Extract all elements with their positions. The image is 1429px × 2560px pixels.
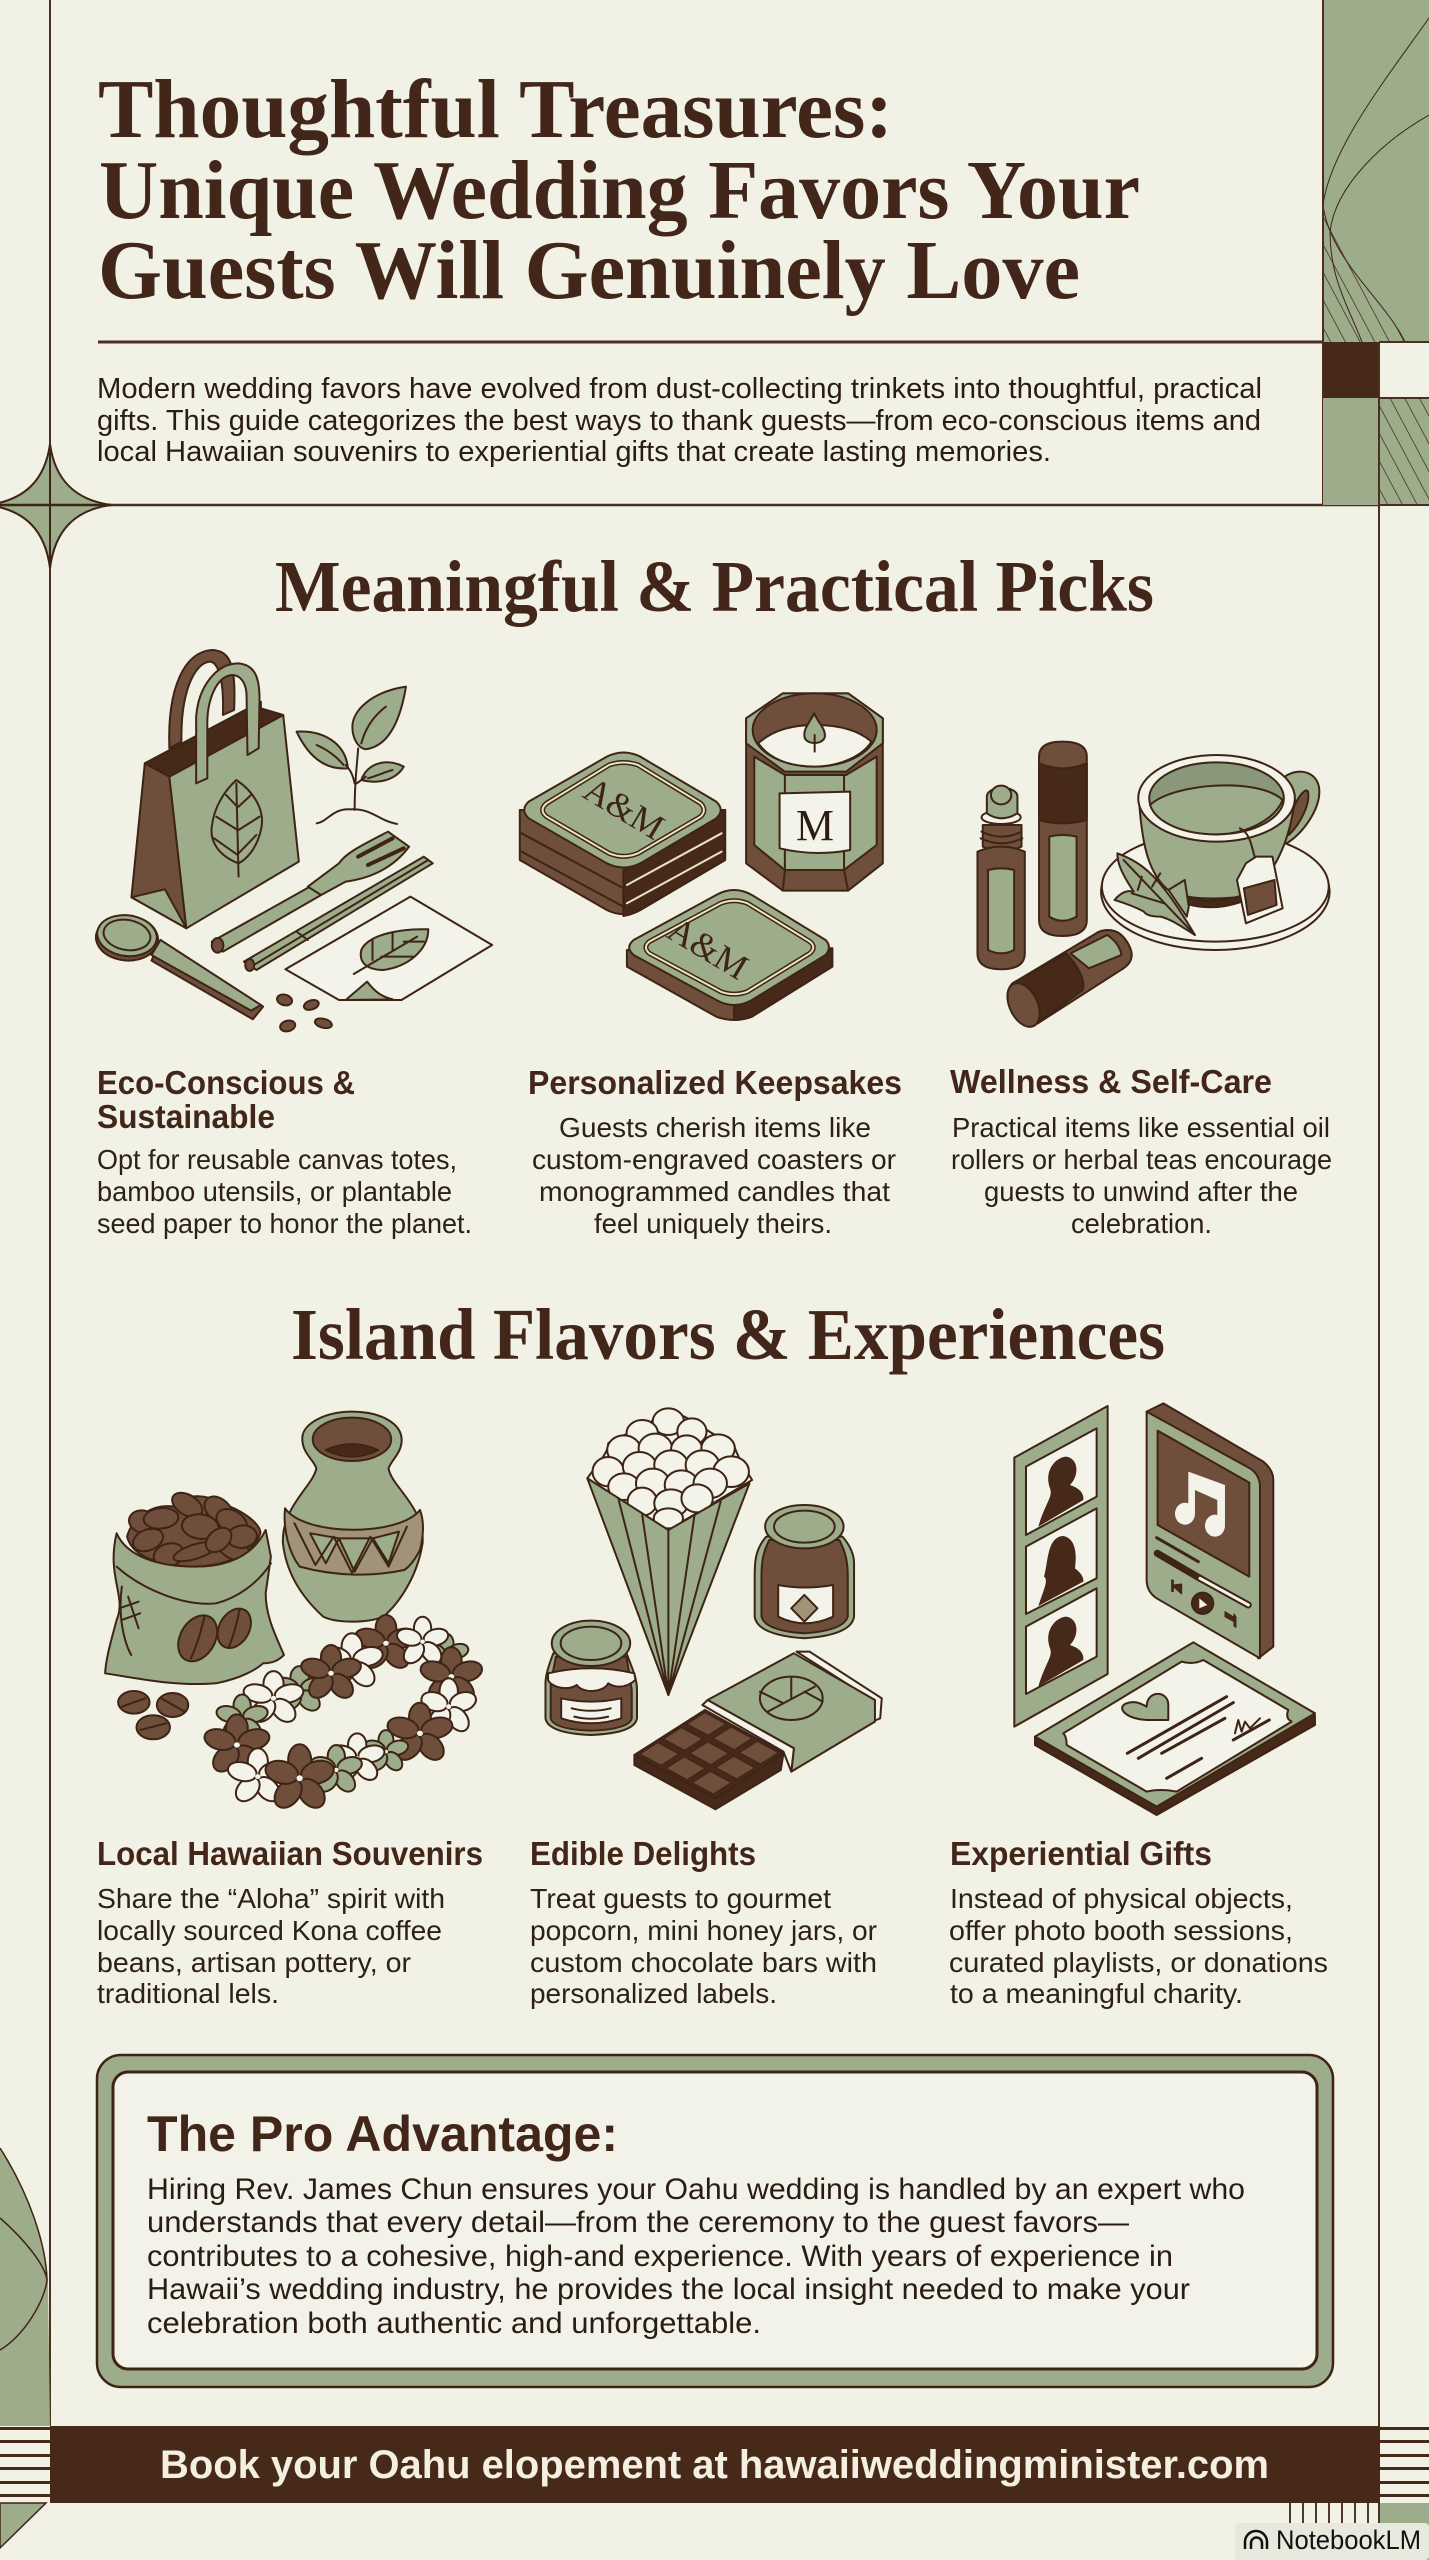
description: popcorn, mini honey jars, or: [530, 1915, 877, 1946]
description: Guests cherish items like: [559, 1112, 871, 1143]
description: [951, 1112, 1332, 1239]
top right geometric panel: [1323, 0, 1429, 505]
card: local hawaiian souvenirs: [97, 1412, 485, 2009]
icon: coasters and candle: M: [796, 801, 834, 850]
heading: Experiential Gifts: [950, 1835, 1212, 1872]
description: bamboo utensils, or plantable: [97, 1176, 452, 1207]
description: celebration.: [1071, 1208, 1212, 1239]
intro paragraph: [97, 373, 1262, 468]
description: traditional lels.: [97, 1978, 279, 2009]
section heading: island flavors and experiences: Island Flavors & Experiences: [291, 1294, 1165, 1375]
title: Thoughtful Treasures:: [98, 63, 893, 156]
intro paragraph: Modern wedding favors have evolved from dust-collecting trinkets into thoughtful, practical: [97, 373, 1262, 405]
title: [98, 63, 1140, 317]
icon: coffee sack, vase, lei: [105, 1412, 485, 1813]
card: edible delights: [530, 1408, 882, 2009]
description: curated playlists, or donations: [949, 1947, 1328, 1978]
panel body text: Hiring Rev. James Chun ensures your Oahu wedding is handled by an expert who: [147, 2173, 1245, 2206]
description: rollers or herbal teas encourage: [951, 1144, 1332, 1175]
panel body text: [147, 2173, 1245, 2340]
heading: Wellness & Self-Care: [950, 1063, 1272, 1100]
title: Unique Wedding Favors Your: [99, 144, 1140, 237]
heading: Local Hawaiian Souvenirs: [97, 1835, 483, 1872]
heading: Personalized Keepsakes: [528, 1064, 902, 1101]
icon: photo strip, music player, donation card: [1014, 1403, 1315, 1815]
panel body text: understands that every detail—from the ceremony to the guest favors—: [147, 2206, 1129, 2239]
icon: coasters and candle: [520, 693, 883, 1020]
description: monogrammed candles that: [539, 1176, 890, 1207]
card: eco-conscious and sustainable: [86, 650, 492, 1239]
description: Treat guests to gourmet: [530, 1883, 831, 1914]
card: personalized keepsakes: [520, 693, 902, 1239]
description: personalized labels.: [530, 1978, 777, 2009]
bottom corner ornaments: [0, 2503, 1429, 2560]
title: Guests Will Genuinely Love: [98, 224, 1080, 317]
description: guests to unwind after the: [984, 1176, 1298, 1207]
description: beans, artisan pottery, or: [97, 1947, 411, 1978]
footer side stripes: [0, 2427, 1429, 2497]
intro paragraph: gifts. This guide categorizes the best ways to thank guests—from eco-conscious items and: [97, 405, 1261, 437]
description: locally sourced Kona coffee: [97, 1915, 442, 1946]
description: [532, 1112, 896, 1239]
heading: Edible Delights: [530, 1835, 756, 1872]
panel heading: The Pro Advantage:: [147, 2106, 618, 2162]
icon: coasters and candle: A&M: [661, 909, 755, 988]
description: custom-engraved coasters or: [532, 1144, 896, 1175]
description: Practical items like essential oil: [952, 1112, 1330, 1143]
heading: [97, 1064, 355, 1135]
card: wellness and self-care: [950, 742, 1332, 1239]
description: offer photo booth sessions,: [949, 1915, 1293, 1946]
panel body text: Hawaii’s wedding industry, he provides the local insight needed to make your: [147, 2273, 1190, 2306]
description: [97, 1883, 445, 2009]
call to action band: [50, 2426, 1380, 2503]
description: feel uniquely theirs.: [594, 1208, 832, 1239]
description: to a meaningful charity.: [950, 1978, 1243, 2009]
section heading: meaningful and practical picks: Meaningful & Practical Picks: [275, 546, 1154, 627]
description: Instead of physical objects,: [950, 1883, 1293, 1914]
left side green arc ornament: [0, 2148, 50, 2426]
icon: popcorn, honey jars, chocolate bar: [545, 1408, 882, 1809]
card: experiential gifts: [949, 1403, 1328, 2009]
description: custom chocolate bars with: [530, 1947, 877, 1978]
icon: coasters and candle: A&M: [577, 769, 671, 848]
description: [949, 1883, 1328, 2009]
icon: tote bag, plant, utensils, seed paper: [86, 650, 492, 1034]
description: Share the “Aloha” spirit with: [97, 1883, 445, 1914]
description: seed paper to honor the planet.: [97, 1208, 472, 1239]
panel: the pro advantage: [97, 2055, 1333, 2387]
NotebookLM badge: NotebookLM: [1276, 2525, 1421, 2555]
NotebookLM badge: [1235, 2523, 1429, 2560]
intro paragraph: local Hawaiian souvenirs to experiential gifts that create lasting memories.: [97, 436, 1051, 468]
icon: oil rollers and herbal tea: [977, 742, 1330, 1030]
call to action band: Book your Oahu elopement at hawaiiweddingminister.com: [160, 2443, 1269, 2487]
panel body text: celebration both authentic and unforgettable.: [147, 2307, 761, 2340]
star ornament: [0, 444, 111, 568]
description: [97, 1144, 472, 1239]
heading: Eco-Conscious &: [97, 1064, 355, 1101]
heading: Sustainable: [97, 1098, 275, 1135]
description: [530, 1883, 877, 2009]
panel body text: contributes to a cohesive, high-and experience. With years of experience in: [147, 2240, 1173, 2273]
description: Opt for reusable canvas totes,: [97, 1144, 457, 1175]
